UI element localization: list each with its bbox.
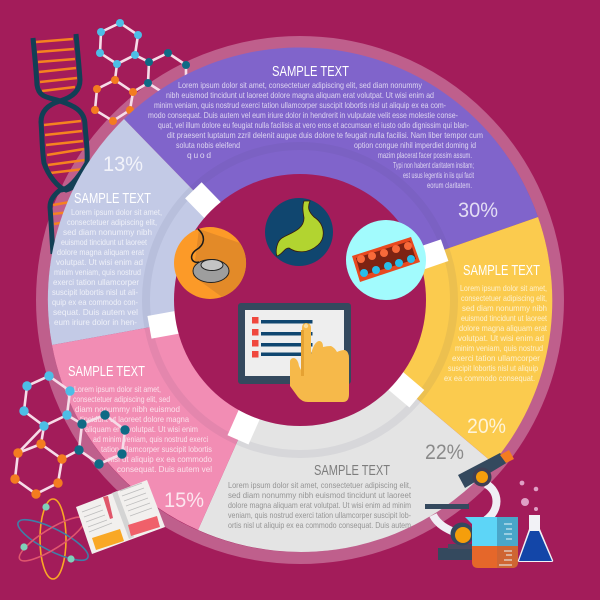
icon: upper molecule bbox=[91, 19, 190, 125]
body: lavender: quip ex ea commodo con- bbox=[52, 297, 138, 307]
body: lavender: euismod tincidunt ut laoreet bbox=[61, 237, 148, 247]
body: grey: sed diam nonummy nibh euismod tincidunt ut laoreet bbox=[228, 490, 412, 500]
white tabs bbox=[147, 182, 448, 445]
body: purple: dit praesent luptatum zzril delenit augue duis dolore te feugait nulla facilisi. Nam liber tempor cum bbox=[167, 130, 483, 140]
icon: DNA helix bbox=[33, 34, 87, 254]
body: yellow: sed diam nonummy nibh bbox=[462, 303, 547, 313]
icon: tablet with checklist and hand bbox=[238, 303, 351, 402]
body: yellow: ex ea commodo consequat. bbox=[444, 373, 535, 383]
body: purple: eorum claritatem. bbox=[427, 180, 472, 190]
icon: flask bbox=[518, 515, 553, 562]
body: purple: option congue nihil imperdiet doming id bbox=[354, 140, 476, 150]
panel: grey sector 22% bbox=[198, 300, 493, 552]
value: 20%: 20% bbox=[467, 415, 506, 438]
body: purple: mazim placerat facer possim assum. bbox=[378, 150, 472, 160]
body: lavender: dolore magna aliquam erat bbox=[57, 247, 145, 257]
body: yellow: suscipit lobortis nisl ut aliquip bbox=[448, 363, 538, 373]
icon: pill pack bbox=[346, 220, 426, 300]
body: pink: tation ullamcorper suscipit lobortis bbox=[101, 444, 212, 454]
heading: purple: SAMPLE TEXT bbox=[272, 64, 349, 80]
icon: lower molecule bbox=[10, 371, 130, 499]
body: lavender: sed diam nonummy nibh bbox=[63, 227, 152, 237]
body: lavender: minim veniam, quis nostrud bbox=[54, 267, 141, 277]
tablet bbox=[238, 303, 351, 384]
body: grey: Lorem ipsum dolor sit amet, consectetuer adipiscing elit, bbox=[228, 480, 411, 490]
heading: lavender: SAMPLE TEXT bbox=[74, 191, 151, 207]
body: purple: Typi non habent claritatem insitam; bbox=[393, 160, 474, 170]
body: yellow: volutpat. Ut wisi enim ad bbox=[458, 333, 544, 343]
panel: pink sector 15% bbox=[52, 300, 300, 530]
body: lavender: exerci tation ullamcorper bbox=[53, 277, 139, 287]
value: 15%: 15% bbox=[164, 489, 204, 512]
text block: pink sector bbox=[68, 364, 212, 474]
body: lavender: eum iriure dolor in hen- bbox=[54, 317, 137, 327]
body: pink: consectetuer adipiscing elit, sed bbox=[73, 394, 170, 404]
text block: yellow sector bbox=[444, 263, 548, 383]
body: lavender: suscipit lobortis nisl ut ali- bbox=[52, 287, 138, 297]
tablet screen bbox=[245, 310, 344, 376]
body: purple: minim veniam, quis nostrud exerci tation ullamcorper suscipit lobortis nisl ut aliquip ex ea com- bbox=[154, 100, 446, 110]
body: pink: tincidunt ut laoreet dolore magna bbox=[80, 414, 189, 424]
body: purple: modo consequat. Duis autem vel eum iriure dolor in hendrerit in vulputate velit esse molestie conse- bbox=[148, 110, 458, 120]
body: grey: dolore magna aliquam erat volutpat. Ut wisi enim ad minim bbox=[228, 500, 411, 510]
body: pink: ad minim veniam, quis nostrud exerci bbox=[93, 434, 208, 444]
body: grey: veniam, quis nostrud exerci tation ullamcorper suscipit lob- bbox=[228, 510, 411, 520]
icon: open book bbox=[76, 480, 165, 554]
body: yellow: consectetuer adipiscing elit, bbox=[461, 293, 547, 303]
body: pink: nisl ut aliquip ex ea commodo bbox=[108, 454, 212, 464]
centre circle bbox=[174, 174, 426, 426]
icon: stethoscope bbox=[174, 227, 246, 299]
value: 22%: 22% bbox=[425, 441, 464, 464]
body: yellow: Lorem ipsum dolor sit amet, bbox=[460, 283, 547, 293]
body: pink: diam nonummy nibh euismod bbox=[75, 404, 180, 414]
body: pink: aliquam erat volutpat. Ut wisi enim bbox=[85, 424, 198, 434]
body: yellow: exerci tation ullamcorper bbox=[452, 353, 540, 363]
heading: pink: SAMPLE TEXT bbox=[68, 364, 145, 380]
body: purple: nibh euismod tincidunt ut laoreet dolore magna aliquam erat volutpat. Ut wisi enim ad bbox=[166, 90, 434, 100]
body: yellow: dolore magna aliquam erat bbox=[459, 323, 548, 333]
body: pink: Lorem ipsum dolor sit amet, bbox=[74, 384, 161, 394]
icon: microscope bbox=[425, 450, 514, 560]
body: lavender: consectetuer adipiscing elit, bbox=[67, 217, 157, 227]
body: purple: Lorem ipsum dolor sit amet, consectetuer adipiscing elit, sed diam nonummy bbox=[178, 80, 423, 90]
icon: beaker bbox=[465, 517, 518, 568]
icon: stomach bbox=[265, 198, 333, 266]
panel: yellow sector 20% bbox=[300, 217, 552, 463]
body: grey bbox=[228, 480, 412, 530]
body: purple: quod bbox=[187, 150, 211, 160]
icon: bubbles bbox=[520, 481, 538, 511]
text block: grey sector bbox=[228, 463, 412, 530]
body: purple bbox=[148, 80, 483, 190]
text block: purple sector bbox=[148, 64, 483, 190]
text block: lavender sector bbox=[52, 191, 162, 327]
icon: atom bbox=[13, 499, 93, 579]
heading: yellow: SAMPLE TEXT bbox=[463, 263, 540, 279]
body: yellow: euismod tincidunt ut laoreet bbox=[461, 313, 548, 323]
heading: grey: SAMPLE TEXT bbox=[314, 463, 390, 479]
body: lavender: sequat. Duis autem vel bbox=[53, 307, 138, 317]
body: pink bbox=[73, 384, 212, 474]
body: yellow bbox=[444, 283, 548, 383]
body: lavender: volutpat. Ut wisi enim ad bbox=[56, 257, 143, 267]
checklist bbox=[252, 317, 312, 358]
body: grey: ortis nisl ut aliquip ex ea commodo consequat. Duis autem bbox=[228, 520, 411, 530]
value: 30%: 30% bbox=[458, 199, 498, 222]
value: 13%: 13% bbox=[103, 153, 143, 176]
inner shaded band bbox=[146, 146, 454, 454]
body: purple: quat, vel illum dolore eu feugiat nulla facilisis at vero eros et accumsan et iusto odio dignissim qui blan- bbox=[158, 120, 469, 130]
body: pink: consequat. Duis autem vel bbox=[117, 464, 212, 474]
panel: purple sector 30% bbox=[124, 47, 538, 300]
body: lavender: Lorem ipsum dolor sit amet, bbox=[71, 207, 162, 217]
hand bbox=[290, 323, 349, 402]
body: lavender bbox=[52, 207, 162, 327]
outer ring bbox=[42, 42, 558, 558]
body: purple: soluta nobis eleifend bbox=[176, 140, 240, 150]
body: yellow: minim veniam, quis nostrud bbox=[455, 343, 543, 353]
body: purple: est usus legentis in iis qui facit bbox=[403, 170, 474, 180]
panel: lavender sector 13% bbox=[48, 119, 300, 345]
